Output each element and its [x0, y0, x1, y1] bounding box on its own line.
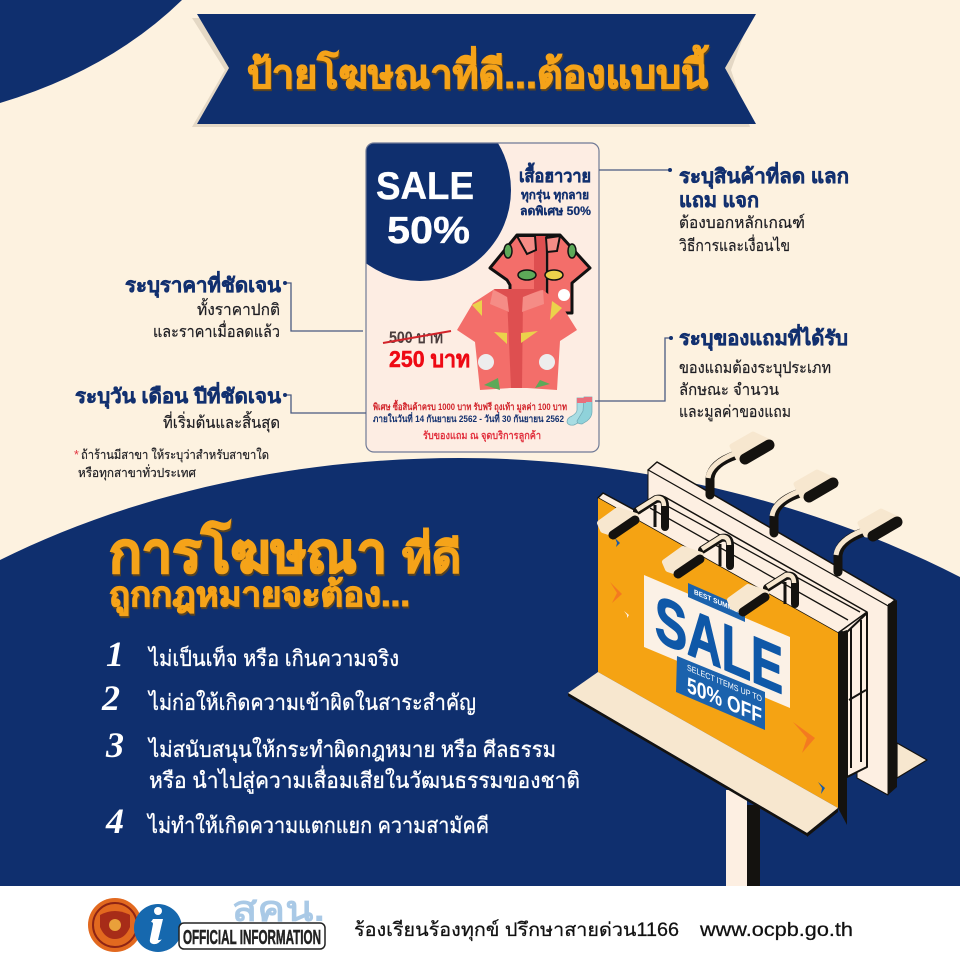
rear lamp row — [708, 434, 898, 572]
title banner — [192, 14, 756, 127]
product heading: ลดพิเศษ 50% — [520, 204, 591, 218]
footer band — [0, 886, 960, 960]
chevron decorations — [610, 538, 825, 794]
sign offer tag — [676, 656, 765, 730]
heading: lawful advertising: ถูกกฎหมายจะต้อง... — [109, 576, 410, 616]
front lamp row — [600, 498, 795, 612]
footnote: หรือทุกสาขาทั่วประเทศ — [78, 464, 196, 481]
callout: product: ระบุสินค้าที่ลด แลก — [679, 161, 849, 189]
promotion conditions — [373, 399, 567, 443]
sale headline: SALE — [376, 165, 474, 208]
rear frame — [648, 462, 897, 795]
callout: product: วิธีการและเงื่อนไข — [679, 234, 790, 255]
base shelf — [568, 672, 838, 837]
title text: ป้ายโฆษณาที่ดี...ต้องแบบนี้ — [247, 45, 710, 97]
list item 4: ไม่ทำให้เกิดความแตกแยก ความสามัคคี — [146, 813, 489, 838]
footnote: * — [74, 448, 79, 462]
logo: information i — [134, 904, 182, 952]
list item 1 — [106, 634, 399, 674]
callout: product: แถม แจก — [679, 190, 759, 212]
heading: lawful advertising — [109, 520, 461, 616]
product heading: เสื้อฮาวาย — [519, 162, 591, 186]
product heading — [519, 162, 591, 218]
callout: dates: ที่เริ่มต้นและสิ้นสุด — [163, 411, 280, 433]
callout: price: และราคาเมื่อลดแล้ว — [153, 320, 280, 341]
icon: front hawaiian shirt — [457, 289, 577, 390]
panel: sale poster — [365, 142, 600, 453]
list item 3 — [105, 725, 580, 794]
sign top tag: BEST SUMMER — [694, 587, 743, 617]
list item 3: 3 — [105, 725, 124, 765]
icon: socks — [567, 397, 592, 425]
promotion conditions: พิเศษ ซื้อสินค้าครบ 1000 บาท รับฟรี ถุงเท้า มูลค่า 100 บาท — [373, 399, 567, 414]
side truss — [847, 613, 867, 777]
connector: dates — [283, 393, 366, 413]
discount figure: 50% — [387, 210, 470, 252]
list item 3: หรือ นำไปสู่ความเสื่อมเสียในวัฒนธรรมของชาติ — [149, 765, 580, 794]
callout: gift: และมูลค่าของแถม — [679, 404, 791, 422]
list item 2: 2 — [101, 678, 120, 718]
list item 1: 1 — [106, 634, 124, 674]
sign word SALE: SALE — [655, 581, 783, 709]
logo: official information stamp: OFFICIAL INFORMATION — [183, 927, 321, 949]
connector: product — [599, 168, 672, 172]
logo: consumer protection seal — [88, 898, 142, 952]
board orange face — [598, 498, 838, 808]
top-left navy corner shape — [0, 0, 182, 103]
sign top tag — [688, 583, 745, 622]
footer hotline: ร้องเรียนร้องทุกข์ ปรึกษาสายด่วน1166 — [354, 919, 679, 942]
footer website: www.ocpb.go.th — [699, 920, 853, 941]
sign panel — [644, 575, 790, 708]
callout: dates — [75, 381, 281, 433]
sign offer tag: 50% OFF — [687, 672, 762, 729]
heading: lawful advertising: การโฆษณา — [109, 520, 387, 584]
lower navy panel — [0, 458, 960, 886]
list item 4 — [105, 801, 489, 841]
footnote: ถ้าร้านมีสาขา ให้ระบุว่าสำหรับสาขาใด — [81, 448, 269, 463]
illustration: billboard — [568, 434, 927, 886]
list item 1: ไม่เป็นเท็จ หรือ เกินความจริง — [147, 644, 399, 671]
billboard post — [726, 790, 760, 886]
sale price: 250 บาท — [389, 346, 470, 372]
callout: price — [125, 270, 281, 341]
logo: official information stamp — [179, 923, 325, 949]
old price with strike: 500 บาท — [389, 328, 443, 347]
list item 2 — [101, 678, 476, 718]
callout: gift: ของแถมต้องระบุประเภท — [679, 359, 831, 378]
connector: gift — [595, 336, 673, 401]
callout: dates: ระบุวัน เดือน ปีที่ชัดเจน — [75, 381, 281, 409]
icon: back hawaiian shirt — [490, 235, 590, 313]
callout: product: ต้องบอกหลักเกณฑ์ — [679, 213, 805, 232]
list item 4: 4 — [105, 801, 124, 841]
callout: gift — [679, 323, 848, 422]
callout: product — [679, 161, 849, 255]
list item 3: ไม่สนับสนุนให้กระทำผิดกฎหมาย หรือ ศีลธรรม — [147, 737, 556, 763]
callout: gift: ลักษณะ จำนวน — [679, 382, 779, 399]
list item 2: ไม่ก่อให้เกิดความเข้าผิดในสาระสำคัญ — [147, 690, 476, 715]
navy sale circle — [366, 144, 511, 281]
product heading: ทุกรุ่น ทุกลาย — [521, 188, 589, 203]
logo: agency wordmark: สคน. — [232, 888, 325, 929]
board top rails — [598, 493, 867, 633]
callout: price: ทั้งราคาปกติ — [197, 298, 280, 319]
callout: price: ระบุราคาที่ชัดเจน — [125, 270, 281, 298]
promotion conditions: รับของแถม ณ จุดบริการลูกค้า — [423, 429, 541, 443]
callout: gift: ระบุของแถมที่ได้รับ — [679, 323, 848, 351]
heading: lawful advertising: ที่ดี — [402, 528, 461, 581]
promotion conditions: ภายในวันที่ 14 กันยายน 2562 - วันที่ 30 กันยายน 2562 — [373, 411, 564, 425]
sign offer tag: SELECT ITEMS UP TO — [687, 662, 762, 704]
board dark side — [838, 630, 847, 825]
rear ledge — [897, 743, 927, 778]
connector: price — [283, 281, 363, 331]
footnote — [74, 448, 269, 481]
